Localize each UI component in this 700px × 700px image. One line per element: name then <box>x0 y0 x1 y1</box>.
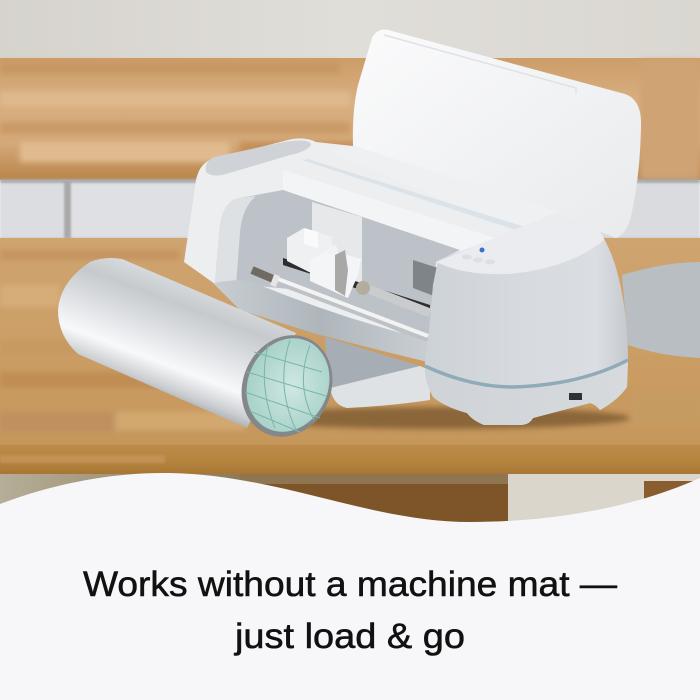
machine shadow <box>250 407 630 429</box>
vinyl roll <box>58 258 348 451</box>
roll end with teal grid <box>226 321 348 451</box>
cutting carriage <box>287 228 361 298</box>
background: wall <box>0 0 700 60</box>
vinyl sheet behind machine <box>622 262 700 358</box>
housing top panel <box>436 212 604 274</box>
white wave panel <box>0 473 700 700</box>
back slot and dark strip <box>283 258 438 312</box>
accessory tray recess <box>206 141 311 176</box>
cutting machine <box>184 30 641 429</box>
housing lower base <box>425 362 628 425</box>
background: back counter <box>0 58 700 180</box>
caption: Works without a machine mat — <box>83 565 617 604</box>
top deck <box>283 146 597 252</box>
control buttons <box>462 248 495 264</box>
open lid <box>353 30 641 238</box>
inner cavity <box>215 190 460 345</box>
vinyl feeding into machine <box>213 280 428 362</box>
blue accent band <box>425 360 628 387</box>
USB port <box>569 393 582 400</box>
front wooden counter <box>0 238 700 474</box>
background: cabinets <box>0 179 700 239</box>
machine left body <box>184 138 597 345</box>
paper tray under vinyl <box>325 337 430 408</box>
under-counter area <box>0 474 700 526</box>
back guide rail <box>363 287 430 313</box>
caption <box>83 565 617 656</box>
caption: just load & go <box>234 617 465 656</box>
front guide rail <box>252 270 428 338</box>
right end housing <box>425 212 628 425</box>
carriage back block <box>312 202 362 290</box>
